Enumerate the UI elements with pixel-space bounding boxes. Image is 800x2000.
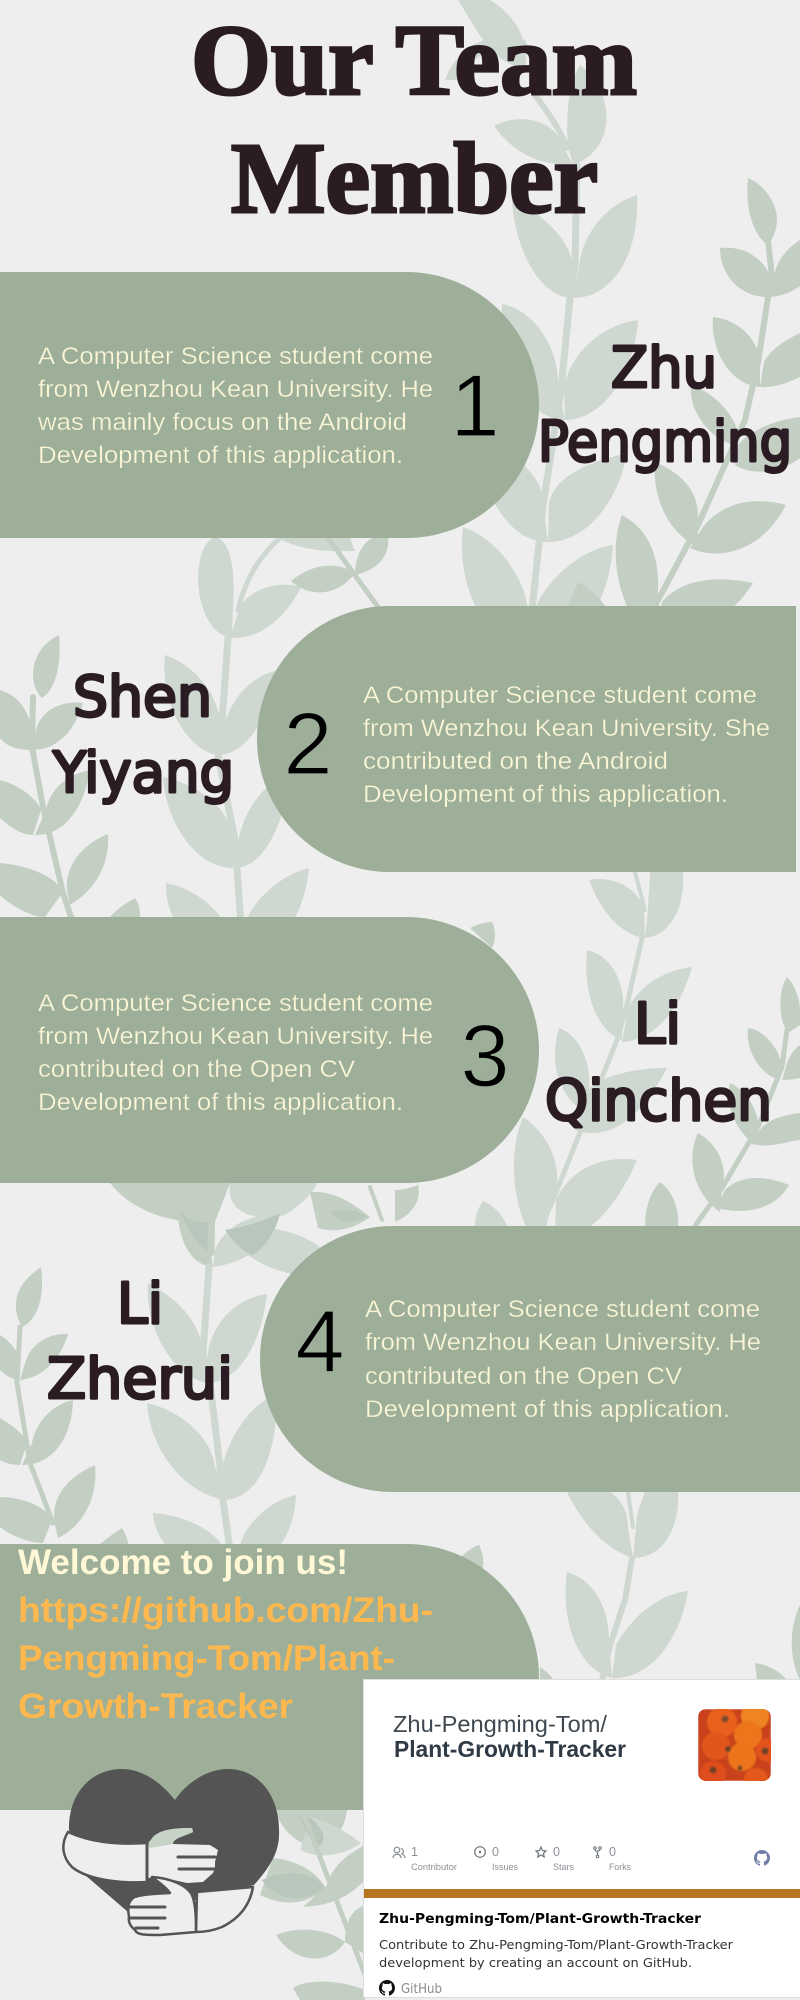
icon: github mark black [379, 1980, 395, 1996]
stat: contributor: Contributor [411, 1862, 457, 1873]
link description: development by creating an account on GitHub. [379, 1955, 692, 1970]
stat: issues: Issues [492, 1862, 518, 1873]
stat: stars [536, 1845, 574, 1873]
panel: member 3 [0, 917, 539, 1183]
name: Zhu Pengming: Zhu [611, 336, 717, 401]
stat: stars: Stars [553, 1862, 574, 1873]
description 1: A Computer Science student come [38, 343, 433, 370]
description 2 [363, 682, 770, 808]
description 4: A Computer Science student come [365, 1296, 760, 1323]
link description [379, 1937, 734, 1970]
description 1: from Wenzhou Kean University. He [38, 376, 433, 403]
description 2: A Computer Science student come [363, 682, 757, 709]
description 2: contributed on the Android [363, 748, 668, 775]
stat: forks [594, 1845, 631, 1873]
stat: contributor [393, 1845, 457, 1873]
card background [364, 1680, 800, 1998]
name: Li Qinchen: Li [634, 992, 681, 1057]
description 1: was mainly focus on the Android [37, 409, 407, 436]
number 3: 3 [461, 1006, 509, 1105]
panel shape 3 [0, 917, 539, 1183]
panel: member 2 [257, 606, 796, 872]
description 3 [38, 990, 433, 1116]
image: persimmons avatar [698, 1709, 771, 1781]
stat: issues [475, 1845, 518, 1873]
title: Member [231, 122, 598, 234]
link title: Zhu-Pengming-Tom/Plant-Growth-Tracker [379, 1911, 701, 1927]
name: Shen Yiyang [52, 665, 234, 806]
description 4 [365, 1296, 761, 1423]
repository name: Plant-Growth-Tracker [394, 1736, 626, 1762]
name: Li Zherui: Zherui [47, 1347, 233, 1412]
repository url: Pengming-Tom/Plant- [18, 1639, 395, 1678]
description 4: contributed on the Open CV [365, 1363, 682, 1390]
stat: forks: 0 [609, 1845, 616, 1859]
stat: stars: 0 [553, 1845, 560, 1859]
panel shape 4 [260, 1226, 800, 1492]
repository url: Growth-Tracker [18, 1687, 293, 1726]
panel: member 1 [0, 272, 539, 538]
name: Li Zherui [47, 1272, 233, 1412]
description 3: Development of this application. [38, 1089, 403, 1116]
link source: GitHub [401, 1982, 442, 1997]
description 4: Development of this application. [365, 1396, 730, 1423]
stat: contributor: 1 [411, 1845, 418, 1859]
description 3: A Computer Science student come [38, 990, 433, 1017]
description 2: Development of this application. [363, 781, 728, 808]
panel shape 5 [0, 1544, 539, 1810]
link description: Contribute to Zhu-Pengming-Tom/Plant-Growth-Tracker [379, 1937, 734, 1952]
description 1: Development of this application. [38, 442, 403, 469]
description 3: contributed on the Open CV [38, 1056, 355, 1083]
description 3: from Wenzhou Kean University. He [38, 1023, 433, 1050]
panel shape 1 [0, 272, 539, 538]
panel: member 4 [260, 1226, 800, 1492]
name: Shen Yiyang: Shen [73, 665, 212, 730]
number 1: 1 [451, 356, 499, 455]
welcome heading: Welcome to join us! [18, 1543, 348, 1582]
name: Li Qinchen: Qinchen [545, 1069, 772, 1134]
panel: github link preview card [364, 1680, 800, 1998]
stat: issues: 0 [492, 1845, 499, 1859]
number 4: 4 [296, 1292, 344, 1391]
panel: join us [0, 1543, 539, 1810]
name: Shen Yiyang: Yiyang [52, 741, 234, 806]
description 1 [37, 343, 433, 469]
title: Our Team [191, 4, 637, 116]
icon: github mark blue [754, 1850, 770, 1866]
stat: forks: Forks [609, 1862, 631, 1873]
name: Li Qinchen [545, 992, 772, 1134]
description 2: from Wenzhou Kean University. She [363, 715, 770, 742]
repository url: https://github.com/Zhu- [18, 1591, 433, 1630]
repository url [18, 1591, 433, 1726]
accent bar [364, 1889, 800, 1898]
number 2: 2 [284, 694, 332, 793]
title [191, 4, 637, 234]
name: Li Zherui: Li [117, 1272, 163, 1337]
panel shape 2 [257, 606, 796, 872]
description 4: from Wenzhou Kean University. He [365, 1329, 761, 1356]
repository owner: Zhu-Pengming-Tom/ [393, 1711, 608, 1737]
name: Zhu Pengming [538, 336, 792, 475]
icon: heart hugged by two arms [63, 1769, 279, 1935]
